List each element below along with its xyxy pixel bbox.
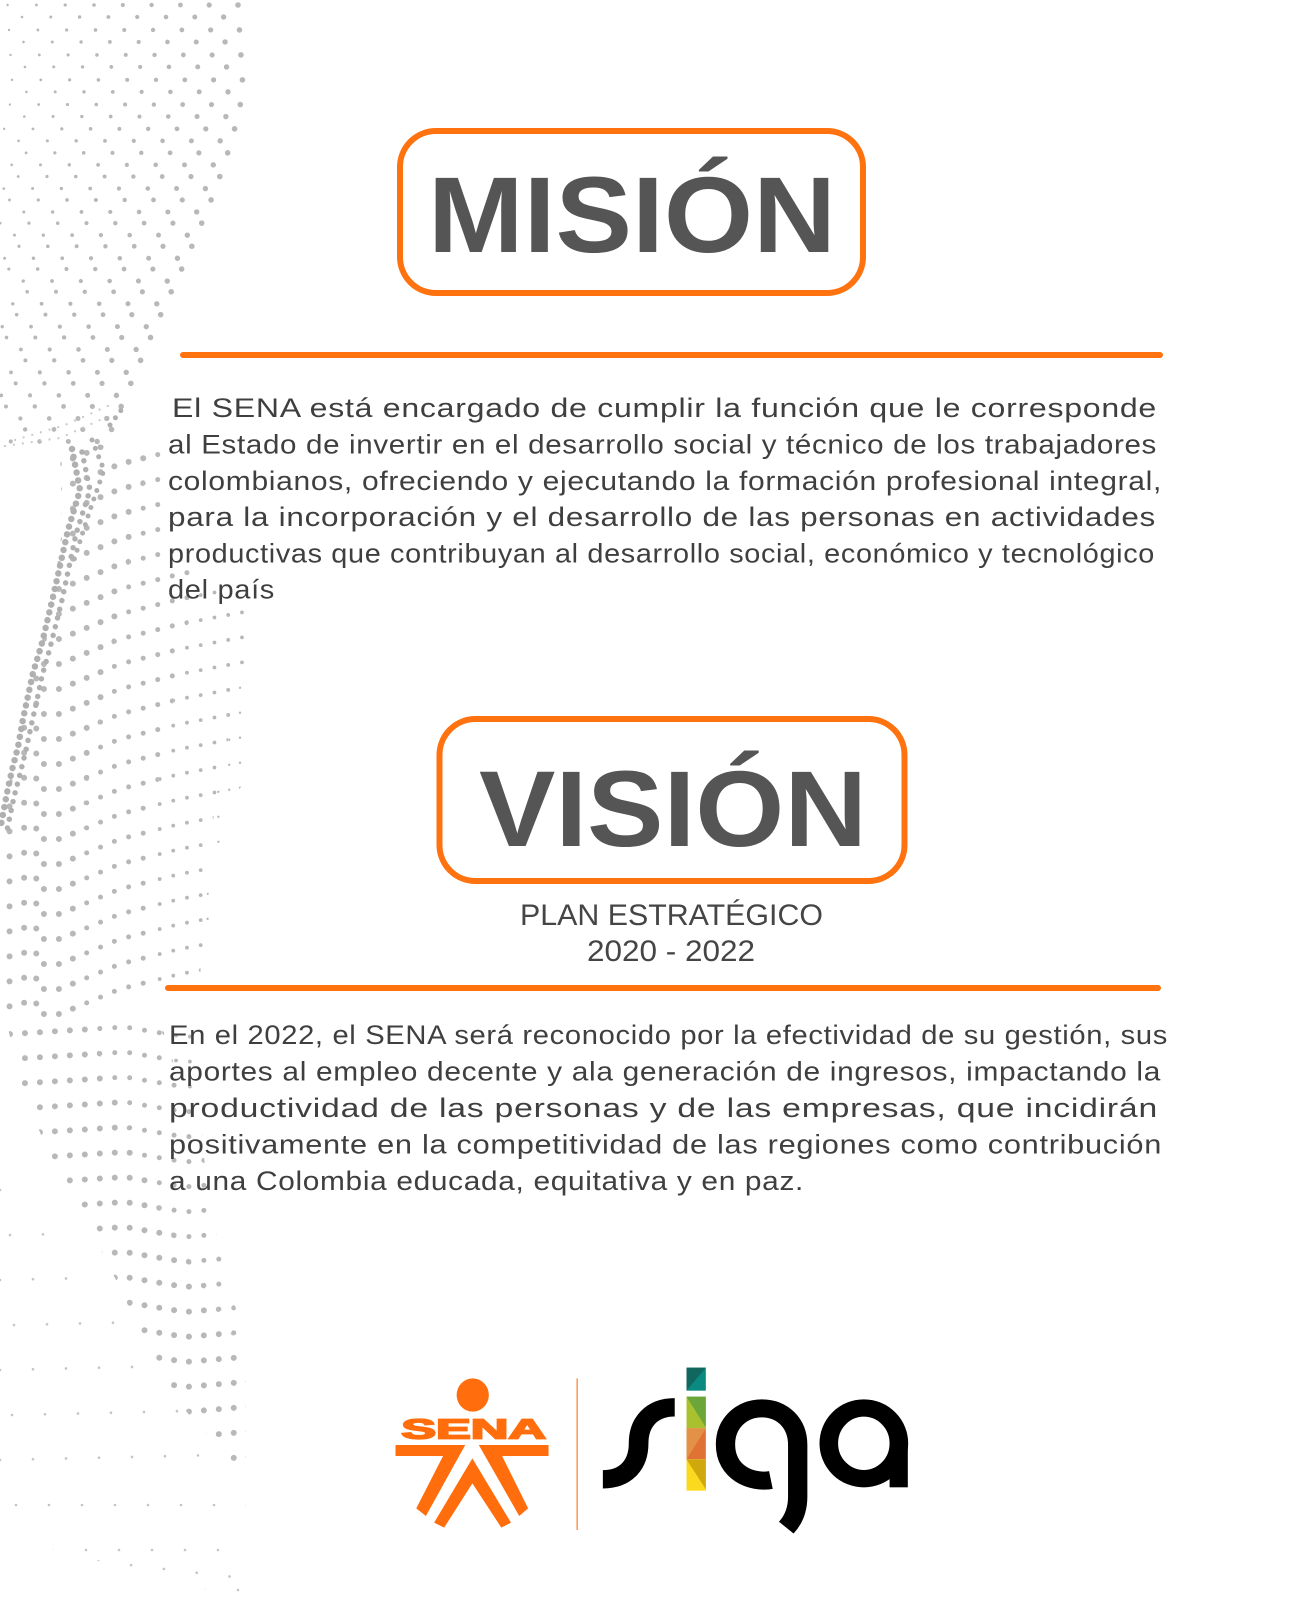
subtitle: plan estrategico: 2020 - 2022 <box>587 935 755 968</box>
panel: visión heading <box>440 719 904 881</box>
logo: SENA: SENA <box>401 1414 546 1445</box>
logo: SENA <box>396 1378 549 1528</box>
divider: vision <box>168 985 1158 991</box>
text block: vision paragraph: En el 2022, el SENA será reconocido por la efectividad de su gestión, sus <box>169 1020 1168 1050</box>
logo divider <box>576 1378 579 1530</box>
vision box <box>440 719 904 881</box>
text block: vision paragraph: productividad de las personas y de las empresas, que incidirán <box>169 1093 1158 1123</box>
mision box <box>400 131 863 293</box>
text block: mision paragraph: del país <box>168 574 275 604</box>
logos <box>396 1368 908 1530</box>
text block: mision paragraph: para la incorporación y el desarrollo de las personas en actividades <box>168 502 1156 532</box>
text block: vision paragraph <box>169 1020 1168 1196</box>
text block: mision paragraph: productivas que contribuyan al desarrollo social, económico y tecnológico <box>168 538 1155 568</box>
vision title: VISIÓN <box>479 748 867 869</box>
text block: vision paragraph: positivamente en la competitividad de las regiones como contribución <box>169 1130 1162 1160</box>
logo: siga <box>603 1368 908 1528</box>
divider: mision <box>183 352 1160 358</box>
text block: mision paragraph: al Estado de invertir en el desarrollo social y técnico de los trabajadores <box>168 430 1157 460</box>
text block: mision paragraph: El SENA está encargado de cumplir la función que le corresponde <box>172 393 1157 423</box>
text block: mision paragraph: colombianos, ofreciendo y ejecutando la formación profesional integral, <box>168 466 1162 496</box>
text block: vision paragraph: aportes al empleo decente y ala generación de ingresos, impactando la <box>169 1056 1161 1086</box>
panel: misión heading <box>400 131 863 293</box>
text block: vision paragraph: a una Colombia educada, equitativa y en paz. <box>169 1166 804 1196</box>
subtitle: plan estrategico <box>520 899 823 968</box>
mision title: MISIÓN <box>428 154 836 275</box>
subtitle: plan estrategico: PLAN ESTRATÉGICO <box>520 899 823 932</box>
dotted wave background <box>0 2 246 1592</box>
text block: mision paragraph <box>168 393 1162 604</box>
